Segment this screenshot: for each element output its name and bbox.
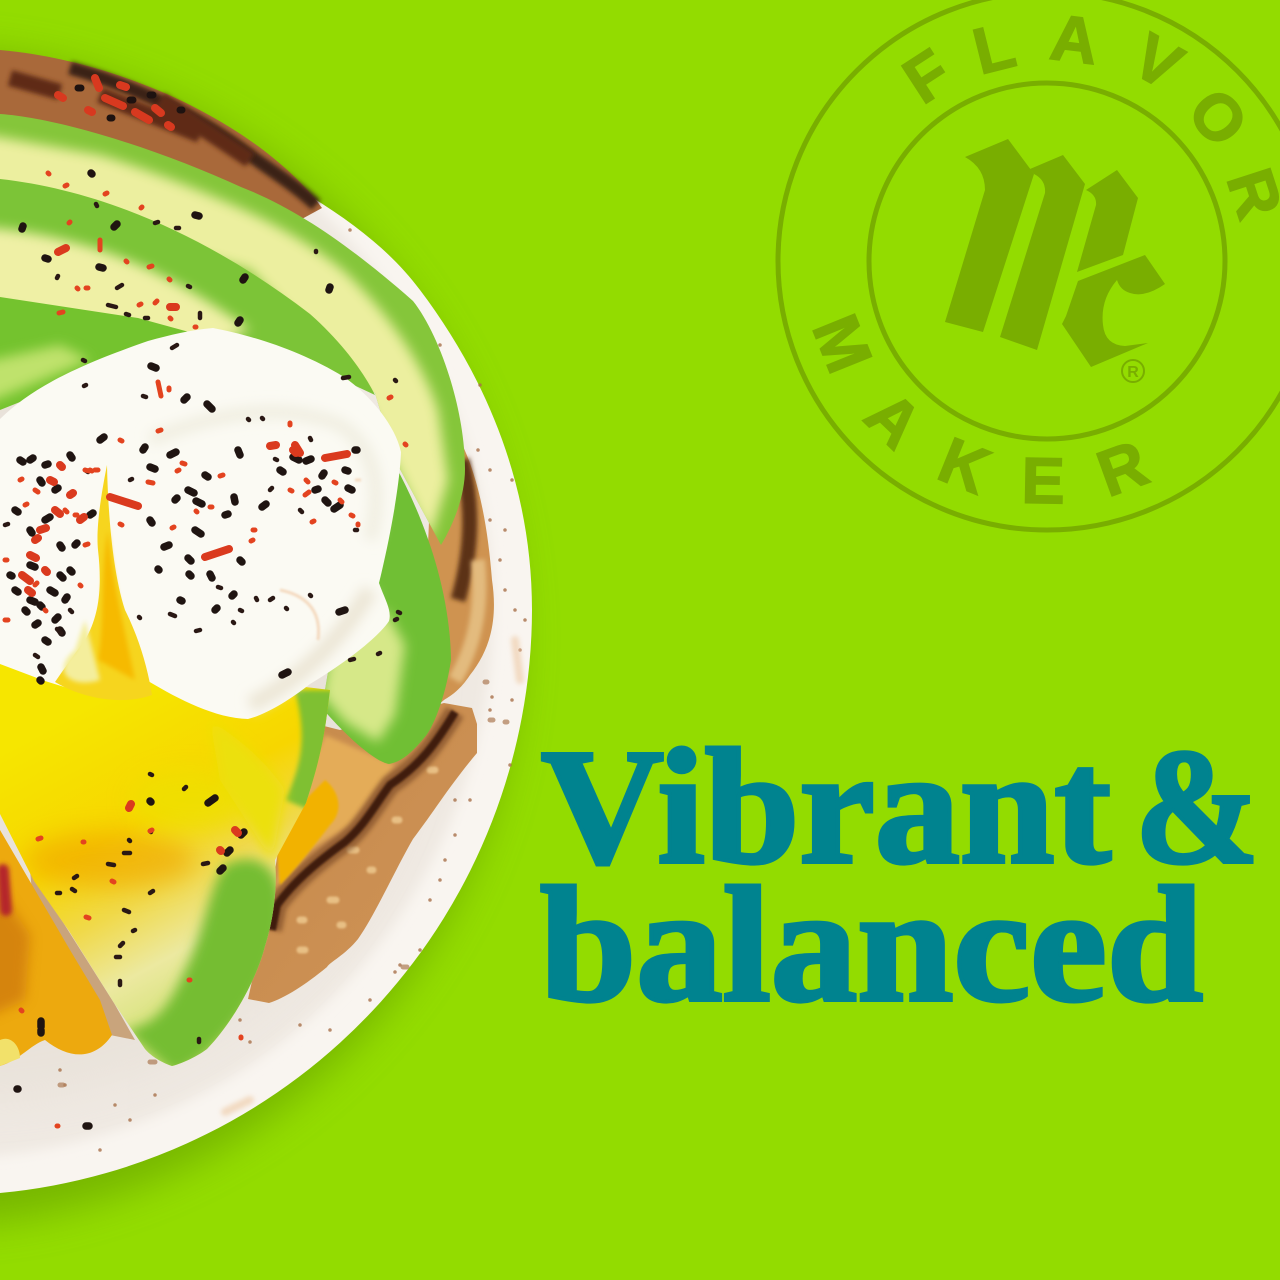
poached egg (0, 328, 401, 719)
red pepper: small flakes (5, 173, 406, 1126)
avocado slice 1: top (0, 114, 465, 545)
logo: MAKER arc text: M (799, 305, 887, 382)
logo inner ring (869, 83, 1225, 439)
heading line 2: balanced (540, 853, 1203, 1036)
logo: registered mark: R (1127, 364, 1139, 381)
logo: FLAVOR arc text: F (890, 35, 963, 118)
logo: FLAVOR arc text (890, 0, 1280, 227)
broken yolk in egg (55, 465, 152, 700)
red pepper: large flakes (22, 248, 347, 851)
avocado slice 5 with yolk (0, 650, 335, 1075)
orange yolk mottling (25, 832, 195, 888)
logo: MAKER arc text: A (852, 377, 936, 462)
avocado slice 3: left (0, 297, 200, 410)
heading line 1: Vibrant (541, 715, 1111, 898)
yolk running over toast (275, 780, 338, 885)
logo: FLAVOR arc text: V (1121, 19, 1194, 104)
plate shadow (0, 51, 517, 1225)
avocado slice 4: right, under egg (322, 465, 451, 764)
food photo: plate with avocado toast (0, 50, 532, 1225)
plate inner well (0, 211, 491, 1154)
plate speckles (60, 230, 525, 1150)
logo: MAKER arc text: R (1088, 426, 1157, 511)
plate (0, 60, 532, 1193)
avocado slice 2: middle (0, 179, 375, 395)
toast top red flakes (58, 78, 171, 127)
logo: MAKER arc text: E (1021, 444, 1065, 517)
lower-left toast edge (30, 870, 135, 1040)
black pepper: large flakes (10, 173, 357, 1126)
toast: right crust (420, 440, 494, 720)
logo: MAKER arc text: K (929, 423, 1000, 508)
logo: Flavor Maker roundel (778, 0, 1280, 530)
toast golden centre (275, 735, 395, 890)
plate food stain (225, 640, 520, 1112)
egg shading (150, 412, 376, 540)
toast: top crust (0, 50, 322, 220)
egg salmon stain (280, 480, 361, 640)
toast grill line (272, 712, 455, 930)
avocado green skin (125, 859, 282, 1075)
toast: bottom slice (248, 703, 477, 1003)
logo: FLAVOR arc text: L (966, 8, 1022, 88)
logo: Mc monogram (945, 139, 1165, 367)
heading: Vibrant & balanced (540, 715, 1259, 1036)
toast top char (70, 68, 316, 205)
logo: MAKER arc text (799, 305, 1157, 517)
logo: FLAVOR arc text: A (1046, 0, 1102, 78)
black pepper: small flakes (5, 204, 400, 1042)
toast crumb highlights (300, 770, 435, 950)
logo: FLAVOR arc text: O (1174, 75, 1262, 160)
spilled yolk (0, 830, 112, 1066)
heading line 1: & (1135, 715, 1259, 898)
logo outer ring (778, 0, 1280, 530)
logo: registered mark (1122, 360, 1144, 382)
